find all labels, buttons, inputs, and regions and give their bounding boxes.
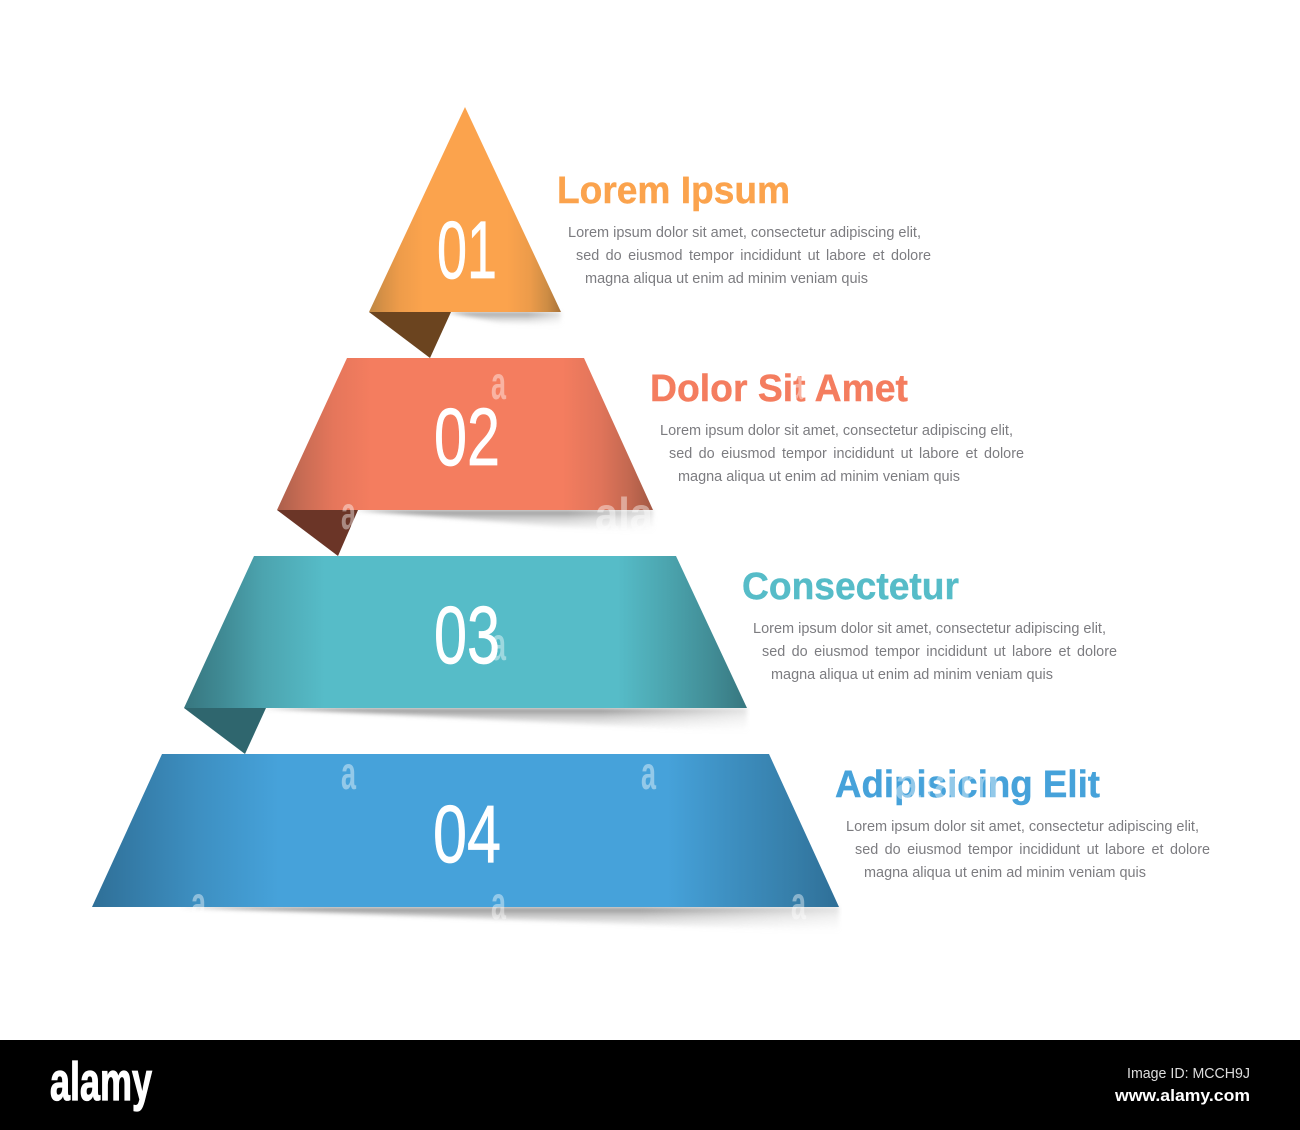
pyramid tier 1 — [369, 107, 561, 358]
body 4: magna aliqua ut enim ad minim veniam quis — [864, 865, 1146, 881]
heading 2: Dolor Sit Amet — [650, 368, 908, 410]
number 03: 03 — [434, 590, 500, 681]
number 01: 01 — [437, 205, 497, 296]
tier 2 fold — [277, 510, 358, 556]
body 1: magna aliqua ut enim ad minim veniam quis — [585, 271, 868, 287]
watermark letters: a — [491, 618, 506, 670]
footer bar — [0, 1040, 1300, 1130]
text block 1 — [557, 170, 931, 287]
pyramid tier 3 — [184, 556, 747, 754]
number 02: 02 — [434, 392, 500, 483]
body 2: Lorem ipsum dolor sit amet, consectetur adipiscing elit, — [660, 423, 1013, 439]
body 2 — [660, 423, 1024, 485]
body 3: sed do eiusmod tempor incididunt ut labore et dolore — [762, 644, 1117, 660]
text block 4 — [835, 764, 1210, 881]
watermark letters: a — [341, 747, 356, 799]
tier 3 fold — [184, 708, 266, 754]
body 2: sed do eiusmod tempor incididunt ut labore et dolore — [669, 446, 1024, 462]
tier 2 band — [277, 358, 653, 510]
body 1: sed do eiusmod tempor incididunt ut labore et dolore — [576, 248, 931, 264]
watermark letters: ala — [595, 488, 653, 540]
tier 3 shadow — [270, 708, 748, 727]
tier 1 fold — [369, 312, 451, 358]
body 2: magna aliqua ut enim ad minim veniam quis — [678, 469, 960, 485]
body 4: Lorem ipsum dolor sit amet, consectetur adipiscing elit, — [846, 819, 1199, 835]
text block 2 — [650, 368, 1024, 485]
watermark letters: a — [341, 487, 356, 539]
watermark letters — [191, 357, 1000, 929]
body 1 — [568, 225, 931, 287]
watermark letters: a — [491, 357, 506, 409]
watermark letters: a — [641, 747, 656, 799]
body 3: magna aliqua ut enim ad minim veniam quis — [771, 667, 1053, 683]
image id: Image ID: MCCH9J — [1127, 1065, 1250, 1082]
tier 2 shadow — [360, 510, 654, 528]
tier 1 triangle — [369, 107, 561, 312]
text block 3 — [742, 566, 1117, 683]
body 3 — [753, 621, 1117, 683]
watermark letters: alam — [895, 757, 1000, 809]
number 04: 04 — [433, 789, 501, 880]
body 3: Lorem ipsum dolor sit amet, consectetur adipiscing elit, — [753, 621, 1106, 637]
website: www.alamy.com — [1114, 1086, 1250, 1105]
body 1: Lorem ipsum dolor sit amet, consectetur adipiscing elit, — [568, 225, 921, 241]
pyramid tier 2 — [277, 358, 653, 556]
body 4: sed do eiusmod tempor incididunt ut labore et dolore — [855, 842, 1210, 858]
heading 3: Consectetur — [742, 566, 959, 608]
tier 1 shadow — [450, 312, 562, 324]
watermark letters: a — [791, 357, 803, 409]
alamy logo: alamy — [50, 1052, 152, 1112]
tier 4 shadow — [190, 907, 840, 926]
heading 1: Lorem Ipsum — [557, 170, 790, 212]
watermark letters: a — [491, 877, 506, 929]
body 4 — [846, 819, 1210, 881]
heading 4: Adipisicing Elit — [835, 764, 1100, 806]
watermark letters: a — [191, 877, 206, 929]
tier 4 band — [92, 754, 839, 907]
watermark letters: a — [791, 877, 806, 929]
pyramid tier 4 — [92, 754, 839, 932]
tier 3 band — [184, 556, 747, 708]
